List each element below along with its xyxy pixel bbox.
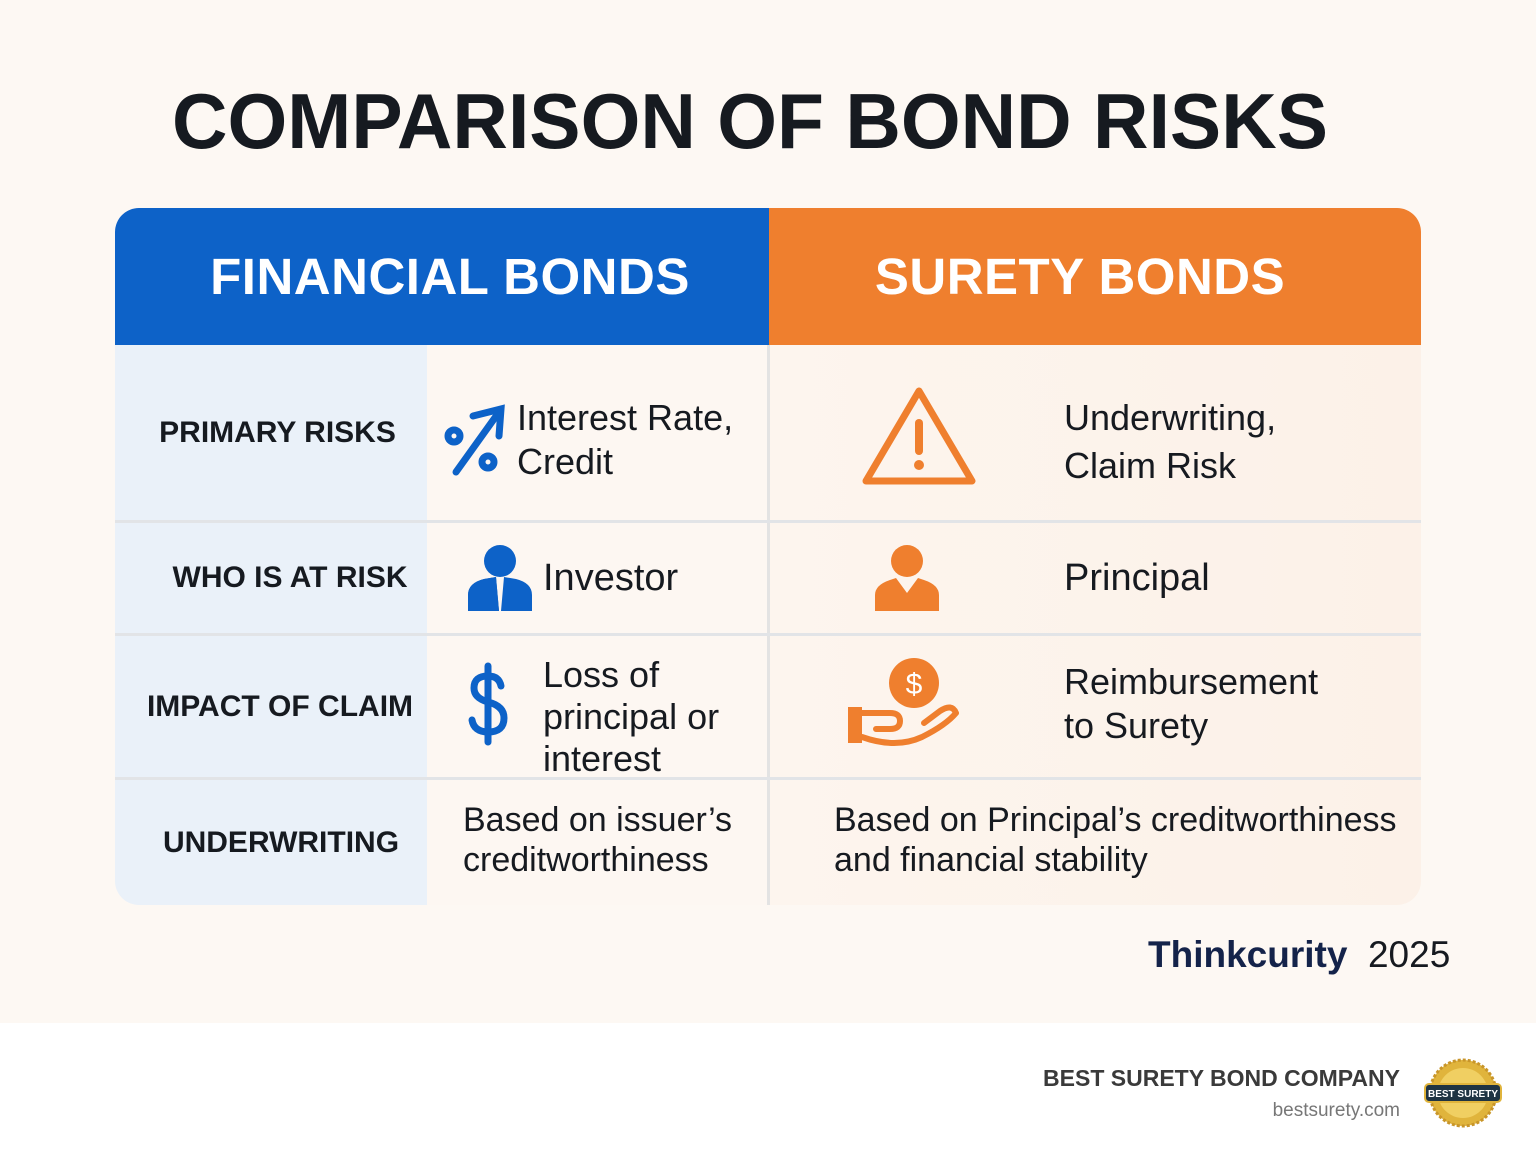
header: financial bonds: FINANCIAL BONDS (210, 248, 690, 305)
header: surety bonds (769, 208, 1421, 345)
footer text: BEST SURETY BOND COMPANY (1043, 1065, 1400, 1091)
row label: underwriting: UNDERWRITING (163, 826, 399, 858)
badge: BEST SURETY (1428, 1089, 1498, 1100)
footer text: bestsurety.com (1273, 1100, 1400, 1121)
text: surety underwriting: Based on Principal’s creditworthiness (834, 801, 1397, 839)
header: surety bonds: SURETY BONDS (875, 248, 1285, 305)
footer (0, 1023, 1536, 1154)
icon: investor person (468, 545, 532, 611)
icon: principal person (875, 545, 939, 611)
header: financial bonds (115, 208, 769, 345)
credit: thinkcurity 2025: Thinkcurity 2025 (1148, 934, 1450, 975)
footer text (1043, 1065, 1400, 1121)
text: interest rate credit: Interest Rate, (517, 397, 733, 438)
text: surety underwriting: and financial stability (834, 841, 1148, 879)
row label: primary risks: PRIMARY RISKS (159, 416, 396, 448)
row label: who is at risk: WHO IS AT RISK (172, 561, 408, 594)
text: reimbursement (1064, 661, 1318, 746)
row label: impact of claim: IMPACT OF CLAIM (147, 690, 413, 722)
icon: hand with coin (848, 658, 959, 746)
text: principal: Principal (1064, 557, 1210, 599)
text: surety underwriting (834, 801, 1397, 879)
text: loss of principal (543, 654, 719, 779)
text: financial underwriting: creditworthiness (463, 841, 709, 879)
text: underwriting claim risk (1064, 397, 1276, 486)
text: reimbursement: Reimbursement (1064, 661, 1318, 702)
text: investor: Investor (543, 557, 678, 599)
text: financial underwriting: Based on issuer’s (463, 801, 732, 839)
text: underwriting claim risk: Claim Risk (1064, 445, 1236, 486)
title: COMPARISON OF BOND RISKS (172, 77, 1328, 165)
text: loss of principal: principal or (543, 696, 719, 737)
badge (1424, 1058, 1502, 1128)
text: underwriting claim risk: Underwriting, (1064, 397, 1276, 438)
text: loss of principal: Loss of (543, 654, 659, 695)
icon: dollar (468, 662, 508, 746)
icon: hand with coin: $ (906, 668, 923, 701)
text: loss of principal: interest (543, 738, 661, 779)
icon: percent arrow (444, 404, 505, 476)
text: interest rate credit (517, 397, 733, 482)
text: financial underwriting (463, 801, 732, 879)
text: reimbursement: to Surety (1064, 705, 1208, 746)
icon: warning triangle (862, 388, 976, 484)
text: interest rate credit: Credit (517, 441, 613, 482)
comparison table (115, 208, 1421, 905)
